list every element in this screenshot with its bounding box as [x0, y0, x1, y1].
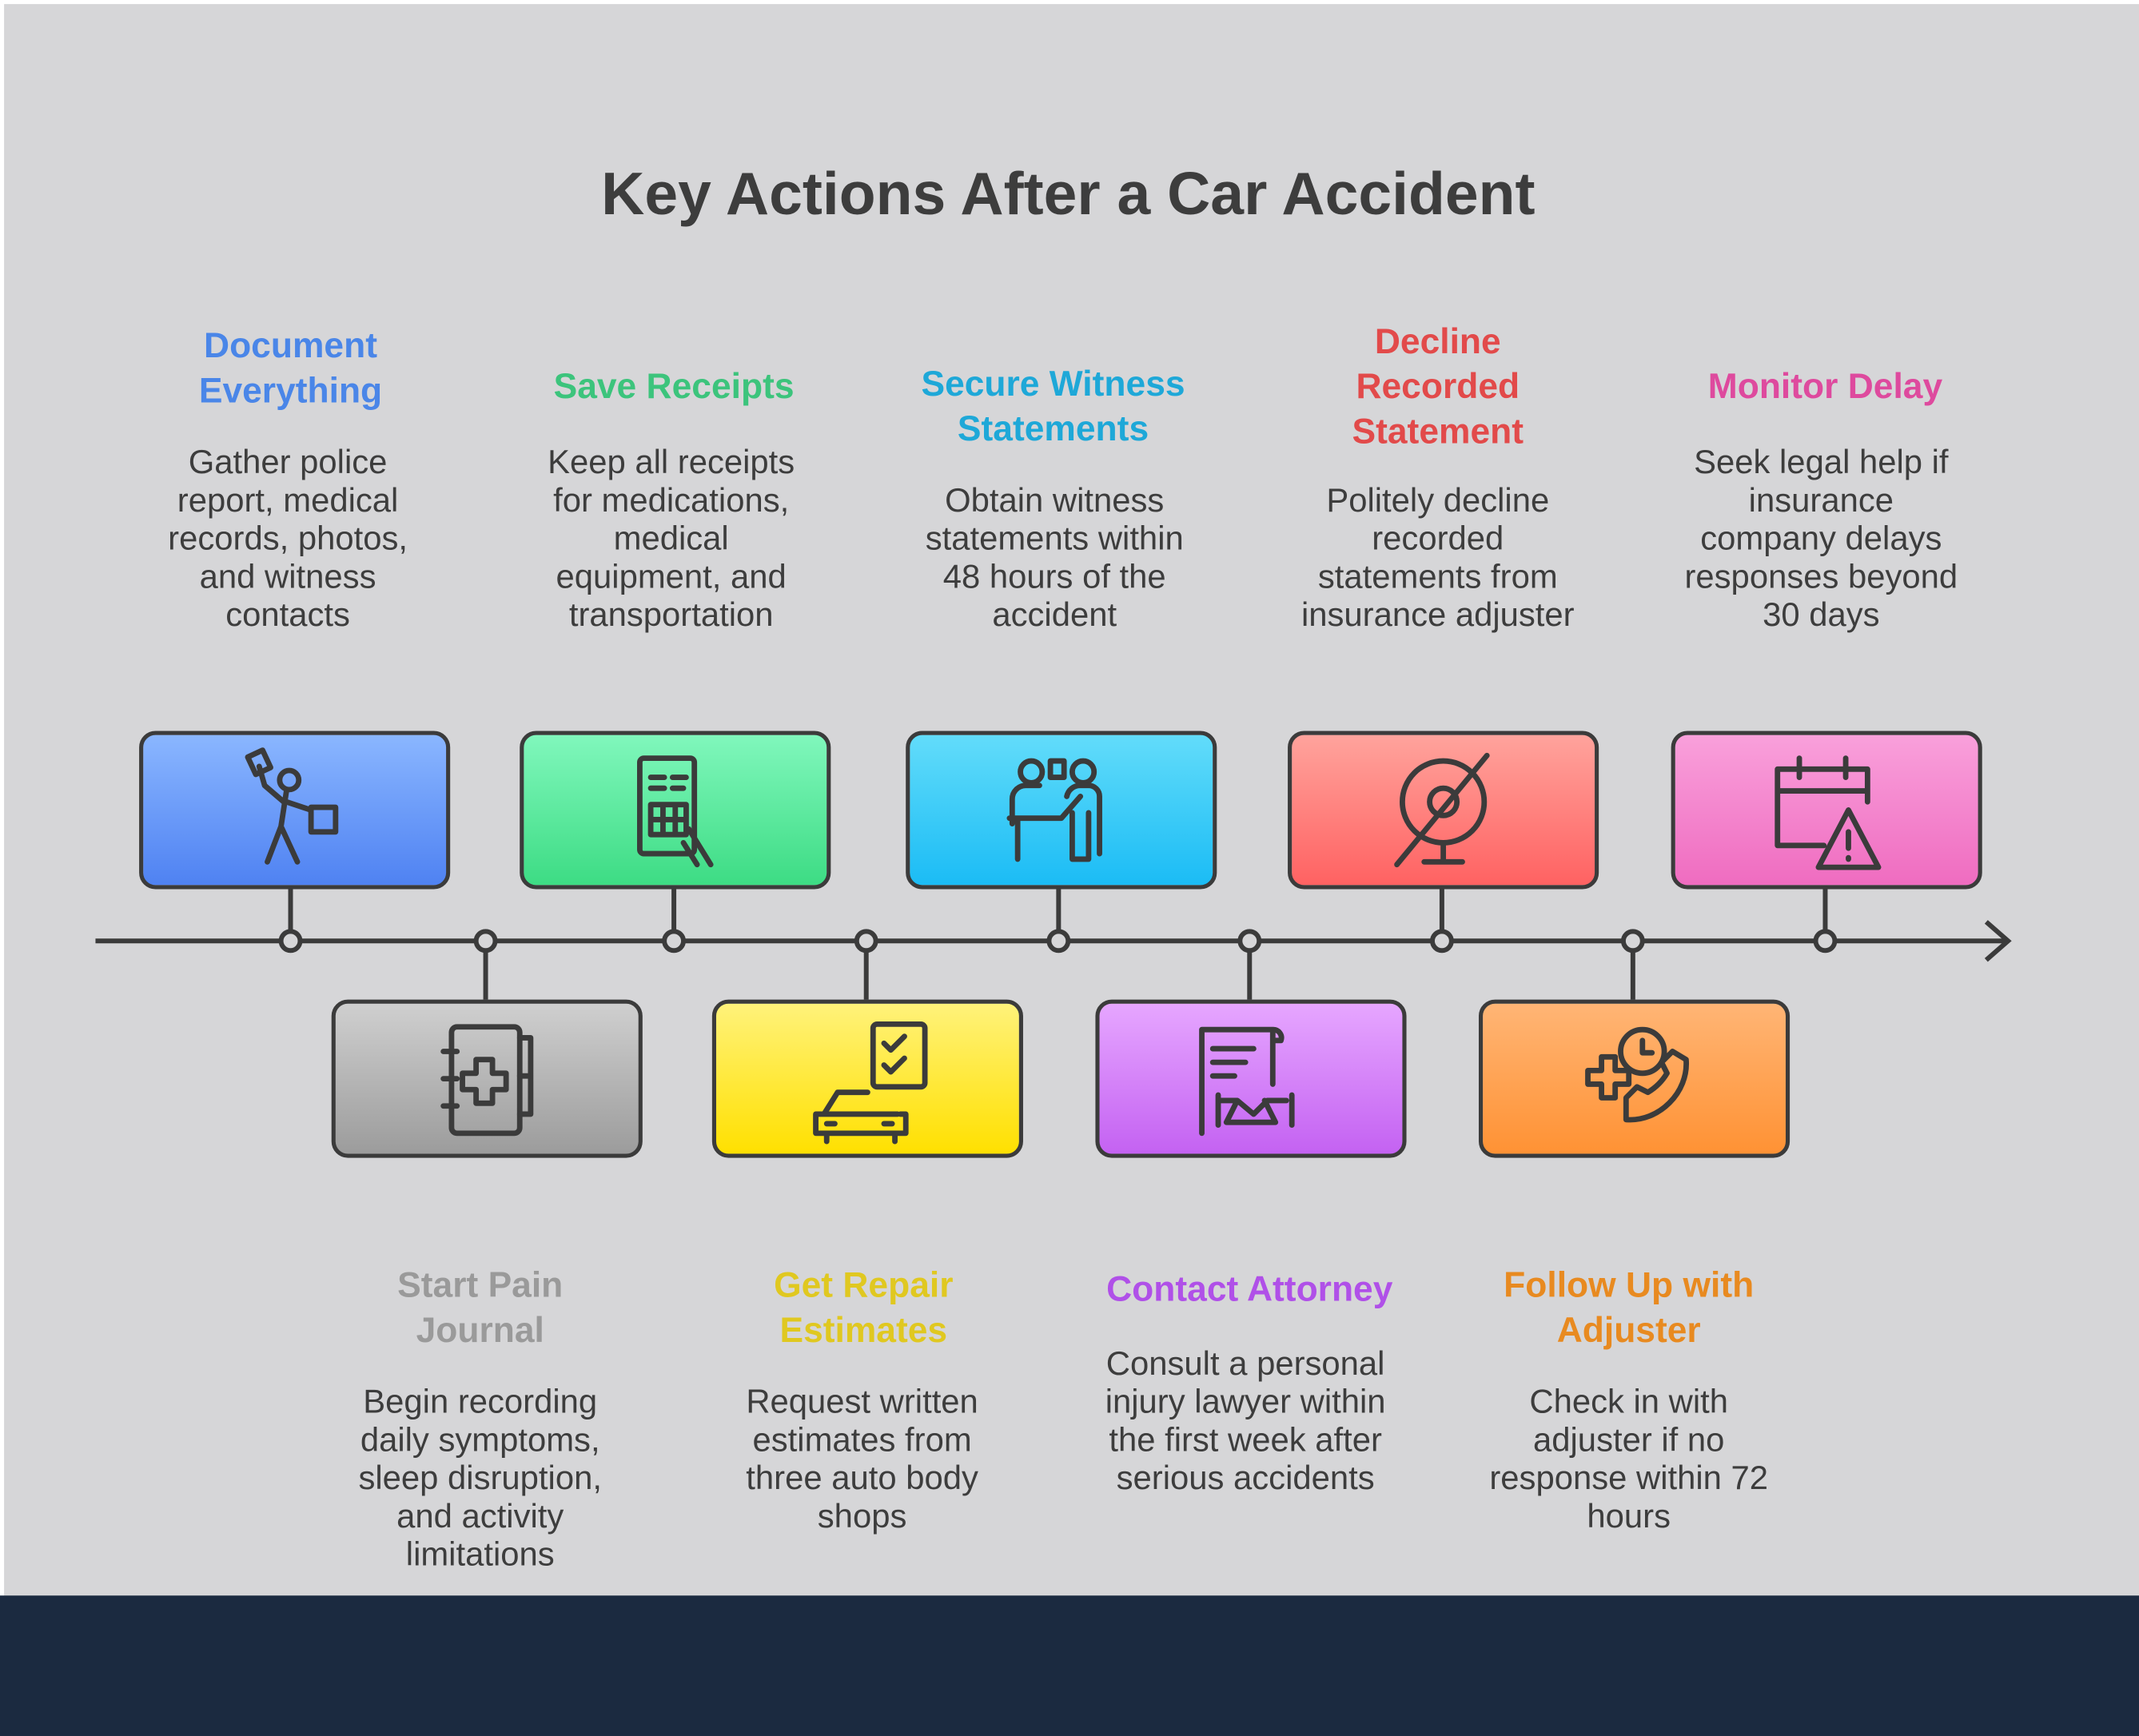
- text: three auto body: [746, 1460, 978, 1497]
- text: Estimates: [779, 1309, 947, 1350]
- panel: Document Everything: [139, 325, 451, 889]
- text: sleep disruption,: [358, 1460, 602, 1497]
- title: Key Actions After a Car Accident: [601, 161, 1535, 228]
- text: 30 days: [1763, 597, 1880, 634]
- text: response within 72: [1489, 1460, 1768, 1497]
- footer band: [0, 1595, 2139, 1736]
- text: Consult a personal: [1106, 1346, 1384, 1383]
- text: daily symptoms,: [360, 1423, 600, 1459]
- text: report, medical: [177, 483, 398, 520]
- text: Follow Up with: [1504, 1264, 1754, 1305]
- panel: Start Pain Journal: [331, 999, 643, 1574]
- text: Secure Witness: [921, 363, 1185, 404]
- text: company delays: [1700, 521, 1942, 558]
- text: adjuster if no: [1533, 1423, 1724, 1459]
- text: statements from: [1318, 559, 1558, 596]
- text: Recorded: [1356, 365, 1520, 406]
- text: records, photos,: [168, 521, 408, 558]
- text: Keep all receipts: [548, 444, 795, 481]
- panel: Monitor Delay: [1671, 365, 1982, 889]
- text: injury lawyer within: [1105, 1384, 1386, 1421]
- text: shops: [818, 1499, 906, 1535]
- text: Contact Attorney: [1106, 1268, 1392, 1309]
- text: for medications,: [553, 483, 789, 520]
- text: Decline: [1375, 321, 1501, 361]
- text: Save Receipts: [554, 365, 795, 406]
- text: Everything: [199, 369, 382, 411]
- text: equipment, and: [556, 559, 787, 596]
- text: Statements: [958, 408, 1149, 448]
- text: Seek legal help if: [1694, 444, 1949, 481]
- text: Document: [204, 325, 377, 365]
- text: Politely decline: [1326, 483, 1549, 520]
- text: Adjuster: [1557, 1309, 1701, 1350]
- text: the first week after: [1109, 1423, 1382, 1459]
- text: statements within: [926, 521, 1184, 558]
- panel: Decline Recorded Statement: [1288, 321, 1599, 889]
- text: and witness: [200, 559, 376, 596]
- text: contacts: [225, 597, 350, 634]
- text: Get Repair: [774, 1264, 954, 1305]
- text: responses beyond: [1684, 559, 1958, 596]
- text: limitations: [406, 1537, 555, 1574]
- text: accident: [992, 597, 1117, 634]
- text: 48 hours of the: [943, 559, 1166, 596]
- text: Obtain witness: [945, 483, 1164, 520]
- text: transportation: [569, 597, 773, 634]
- text: recorded: [1372, 521, 1504, 558]
- text: Gather police: [189, 444, 387, 481]
- text: estimates from: [752, 1423, 972, 1459]
- text: insurance adjuster: [1301, 597, 1575, 634]
- panel: Secure Witness Statements: [906, 363, 1217, 889]
- panel: Get Repair Estimates: [711, 999, 1023, 1535]
- panel: Follow Up with Adjuster: [1479, 999, 1790, 1535]
- text: insurance: [1749, 483, 1894, 520]
- text: Statement: [1352, 411, 1524, 452]
- panel: Contact Attorney: [1095, 999, 1407, 1497]
- text: Request written: [746, 1384, 978, 1421]
- text: serious accidents: [1117, 1460, 1375, 1497]
- text: Journal: [416, 1309, 544, 1350]
- text: medical: [614, 521, 729, 558]
- text: and activity: [396, 1499, 564, 1535]
- text: Monitor Delay: [1708, 365, 1942, 406]
- text: hours: [1587, 1499, 1671, 1535]
- panel: Save Receipts: [520, 365, 831, 889]
- text: Begin recording: [363, 1384, 597, 1421]
- text: Start Pain: [397, 1264, 563, 1305]
- text: Check in with: [1529, 1384, 1728, 1421]
